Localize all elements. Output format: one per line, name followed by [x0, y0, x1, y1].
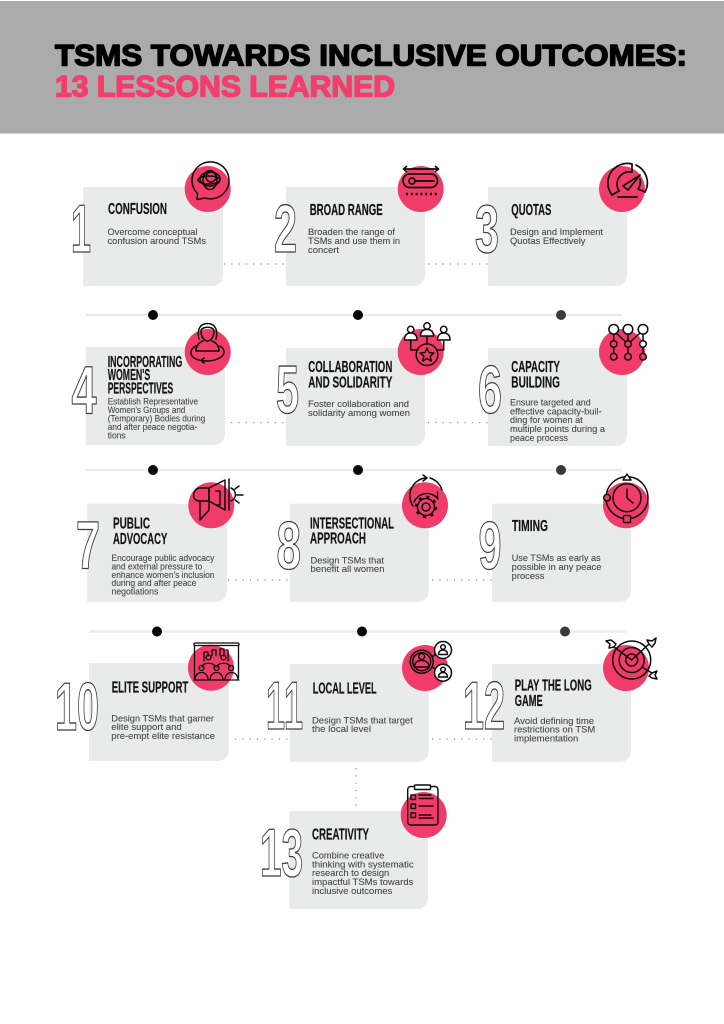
description: Encourage public advocacy [112, 553, 215, 563]
icon: target with arrows [606, 638, 657, 679]
panel: lesson 12 play the long game [463, 638, 657, 762]
description [310, 555, 384, 574]
description: Women's Groups and [108, 405, 185, 415]
icon: megaphone [194, 479, 243, 520]
icon: gear with circular arrows [410, 475, 442, 517]
heading: INCORPORATING [108, 354, 182, 371]
heading: INTERSECTIONAL [310, 515, 394, 532]
heading: LOCAL LEVEL [313, 680, 377, 697]
panel: lesson 13 creativity [260, 785, 447, 909]
heading: APPROACH [310, 531, 366, 548]
number 13: 13 [260, 815, 303, 891]
panel: lesson 4 women's perspectives [72, 324, 231, 445]
description: confusion around TSMs [108, 236, 206, 246]
description: restrictions on TSM [514, 725, 595, 735]
number 2: 2 [274, 191, 297, 267]
number 8: 8 [276, 508, 301, 584]
description: Design TSMs that garner [111, 713, 214, 723]
description: pre-empt elite resistance [111, 731, 215, 741]
panel: lesson 2 broad range [274, 166, 444, 286]
description: possible in any peace [512, 562, 601, 572]
heading: AND SOLIDARITY [308, 374, 393, 391]
title [55, 40, 687, 104]
description: TSMs and use them in [308, 236, 400, 246]
description: inclusive outcomes [312, 886, 393, 896]
heading [515, 677, 592, 710]
description: ding for women at [510, 415, 583, 425]
panel: lesson 9 timing [478, 474, 649, 602]
icon: checklist clipboard [408, 785, 438, 825]
description: during and after peace [112, 578, 196, 588]
heading: WOMEN'S [108, 367, 150, 384]
description [510, 398, 606, 443]
description [312, 850, 414, 896]
panel: lesson 3 quotas [475, 163, 647, 286]
description: Foster collaboration and [308, 399, 409, 409]
icon: connected people circles [410, 642, 452, 681]
description: Use TSMs as early as [512, 553, 601, 563]
description [308, 227, 400, 255]
description: peace process [510, 433, 568, 443]
number 5: 5 [276, 352, 299, 428]
description: Broaden the range of [308, 227, 395, 237]
heading: PERSPECTIVES [108, 380, 173, 397]
description: Establish Representative [108, 397, 198, 407]
number 12: 12 [463, 668, 505, 744]
heading [511, 359, 560, 391]
icon: clock with orbit [604, 474, 648, 522]
heading: CONFUSION [108, 201, 167, 218]
description: multiple points during a [510, 424, 606, 434]
heading [308, 359, 393, 391]
heading: BROAD RANGE [310, 202, 383, 219]
icon: audience at presentation [194, 643, 239, 680]
icon: network tree [609, 324, 648, 360]
description: impactful TSMs towards [312, 877, 414, 887]
heading: PUBLIC [113, 515, 150, 532]
heading: CREATIVITY [312, 826, 369, 843]
icon: person with rotation arrow [191, 324, 224, 363]
description: thinking with systematic [312, 859, 414, 869]
heading [108, 354, 182, 397]
description [514, 716, 595, 744]
description [108, 397, 205, 441]
description: enhance women's inclusion [112, 570, 214, 580]
description [112, 553, 215, 596]
description: effective capacity-buil- [510, 406, 602, 416]
heading: ELITE SUPPORT [112, 680, 189, 697]
timeline dots [148, 310, 570, 636]
icon: slider with width arrow [403, 166, 438, 194]
description: negotiations [112, 586, 159, 596]
icon: gauge [608, 163, 647, 197]
panel: lesson 10 elite support [55, 643, 239, 761]
number 3: 3 [475, 191, 499, 267]
description: Quotas Effectively [510, 236, 586, 246]
description: Combine creative [312, 850, 384, 860]
heading: ADVOCACY [113, 531, 168, 548]
title: TSMS TOWARDS INCLUSIVE OUTCOMES: [55, 40, 687, 72]
number 10: 10 [55, 669, 99, 745]
description [308, 399, 410, 418]
title: 13 LESSONS LEARNED [55, 70, 395, 104]
icon: three people and star badge [404, 323, 450, 366]
panel: lesson 5 collaboration [276, 323, 450, 446]
heading [310, 515, 394, 548]
number 11: 1 [266, 668, 285, 744]
description: implementation [514, 734, 578, 744]
description: benefit all women [310, 564, 384, 574]
description: Overcome conceptual [108, 227, 198, 237]
number 9: 9 [478, 508, 502, 584]
heading: CAPACITY [511, 359, 560, 376]
heading: COLLABORATION [308, 359, 392, 376]
panel: lesson 6 capacity building [478, 324, 648, 446]
description: the local level [312, 724, 371, 734]
description: and after peace negotia- [108, 422, 197, 432]
description: Design and Implement [510, 227, 603, 237]
dotted connectors [224, 264, 492, 806]
icon: tangled speech bubble [192, 162, 229, 200]
header band [0, 1, 724, 134]
panel: lesson 8 intersectional approach [276, 475, 448, 602]
heading: PLAY THE LONG [515, 677, 592, 694]
number 6: 6 [478, 352, 502, 428]
number 1: 1 [71, 191, 91, 267]
description: (Temporary) Bodies during [108, 414, 205, 424]
panel: lesson 11 local level [266, 642, 452, 762]
description: concert [308, 245, 339, 255]
panel: lesson 1 confusion [71, 162, 231, 286]
heading: GAME [515, 693, 543, 710]
description: solidarity among women [308, 408, 410, 418]
panel: lesson 7 public advocacy [76, 479, 243, 602]
description: Design TSMs that [310, 555, 384, 565]
heading: QUOTAS [511, 202, 551, 219]
description: Design TSMs that target [312, 715, 413, 725]
description [312, 715, 413, 734]
heading: BUILDING [511, 374, 560, 391]
heading [113, 515, 168, 548]
number 7: 7 [76, 508, 100, 584]
description: Ensure targeted and [510, 398, 591, 408]
description: elite support and [111, 722, 182, 732]
description [510, 227, 603, 246]
description: research to design [312, 868, 389, 878]
number 11: 1 [284, 668, 303, 744]
number 4: 4 [72, 353, 97, 429]
description [111, 713, 215, 741]
heading: TIMING [512, 518, 548, 535]
description: process [512, 571, 545, 581]
description [512, 553, 601, 581]
description: and external pressure to [112, 562, 202, 572]
description: tions [108, 431, 126, 441]
description [108, 227, 206, 246]
description: Avoid defining time [514, 716, 594, 726]
